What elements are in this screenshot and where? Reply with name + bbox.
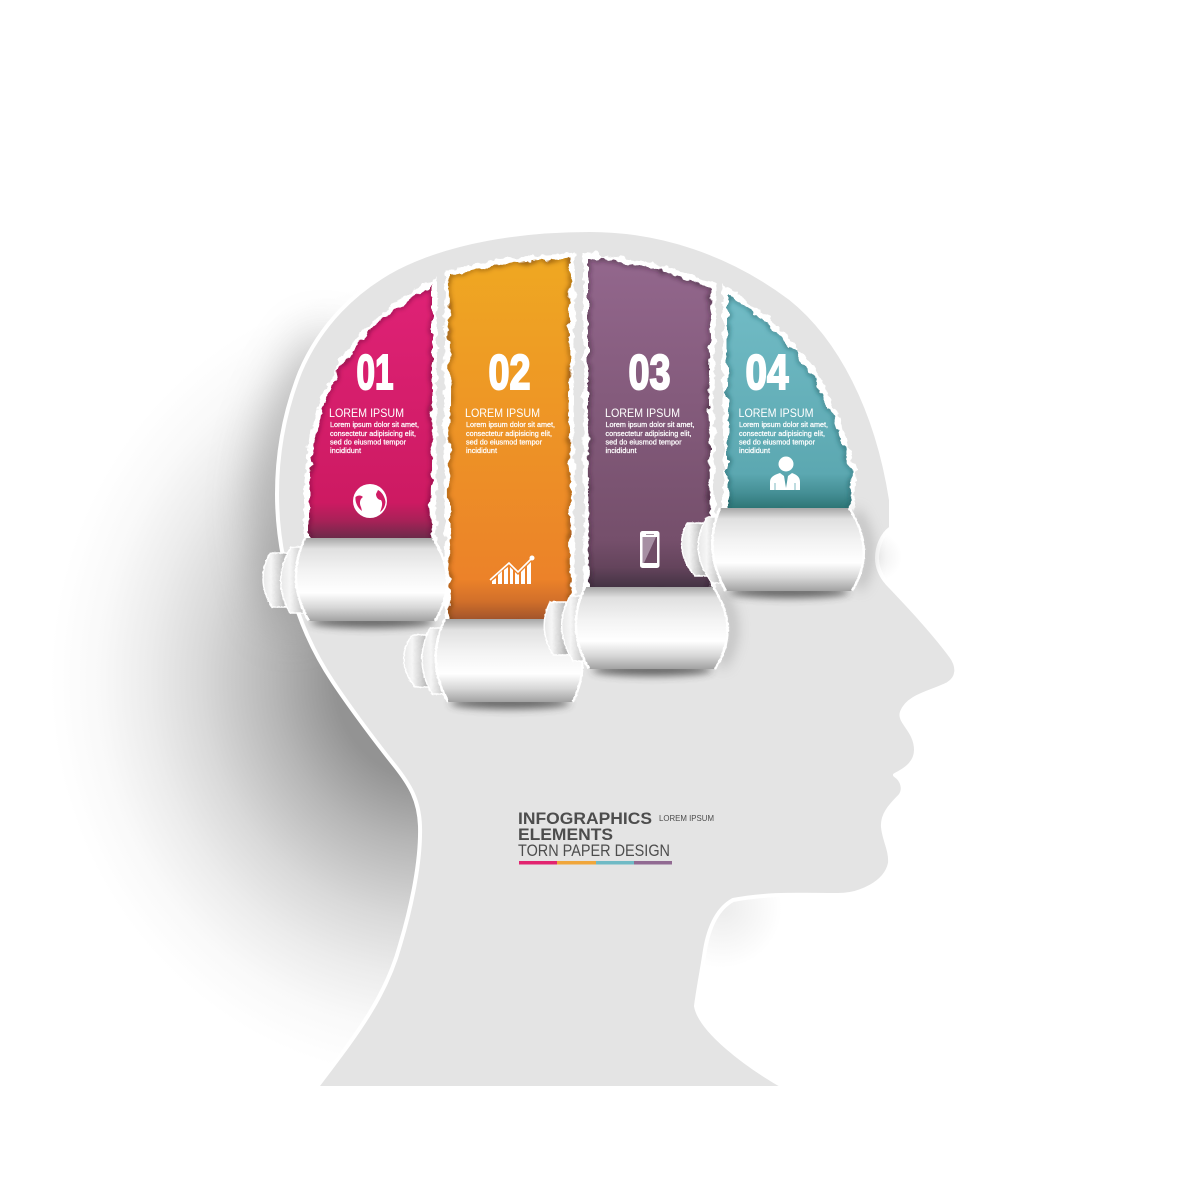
title block: INFOGRAPHICS [518, 809, 652, 828]
text block 04: LOREM IPSUM [738, 408, 814, 420]
text block 03: consectetur adipisicing elit, [606, 429, 692, 438]
text block 04: sed do eiusmod tempor [739, 438, 815, 446]
text block 03: Lorem ipsum dolor sit amet, [606, 420, 694, 429]
text block 02: LOREM IPSUM [465, 408, 540, 420]
text block 02: 02 [488, 346, 530, 400]
title colour bar [519, 861, 672, 864]
torn paper roll 01 [263, 538, 447, 628]
torn paper roll 03 [544, 587, 732, 676]
text block 04 [738, 346, 828, 455]
panel 04: teal torn window [720, 284, 858, 512]
text block 02: sed do eiusmod tempor [466, 438, 542, 446]
text block 01: incididunt [330, 446, 362, 455]
soft shadow at eye notch [854, 533, 902, 581]
text block 02: Lorem ipsum dolor sit amet, [466, 420, 555, 429]
soft shadow under chin [662, 848, 782, 968]
torn paper roll 02 [404, 619, 582, 709]
text block 03: 03 [628, 346, 670, 400]
head silhouette [277, 230, 956, 1088]
text block 04: incididunt [739, 446, 771, 455]
text block 03: LOREM IPSUM [605, 408, 680, 420]
panel 01: pink torn window [302, 276, 440, 542]
text block 04: consectetur adipisicing elit, [739, 429, 825, 438]
title block: LOREM IPSUM [659, 813, 714, 823]
text block 02: incididunt [466, 446, 498, 455]
text block 01: sed do eiusmod tempor [330, 438, 406, 446]
text block 03: sed do eiusmod tempor [606, 438, 682, 446]
text block 03: incididunt [606, 446, 637, 455]
icon: rising bar chart [490, 556, 534, 584]
panel 02: orange torn window [441, 252, 578, 619]
text block 02: consectetur adipisicing elit, [466, 429, 552, 438]
text block 04: 04 [746, 346, 788, 400]
title block: ELEMENTS [518, 825, 613, 844]
icon: smartphone [640, 531, 660, 568]
torn paper roll 04 [682, 508, 868, 598]
text block 01: 01 [356, 346, 394, 400]
text block 03 [605, 346, 694, 455]
title block [518, 809, 714, 860]
text block 01: consectetur adipisicing elit, [330, 429, 416, 438]
icon: globe [353, 484, 387, 518]
text block 01 [329, 346, 419, 455]
title block: TORN PAPER DESIGN [518, 841, 670, 860]
icon: businessman [770, 456, 800, 490]
text block 01: Lorem ipsum dolor sit amet, [330, 420, 419, 429]
shadow cast by head [0, 270, 435, 1090]
text block 02 [465, 346, 555, 455]
text block 01: LOREM IPSUM [329, 408, 404, 420]
panel 03: purple torn window [580, 250, 718, 589]
text block 04: Lorem ipsum dolor sit amet, [739, 420, 828, 429]
